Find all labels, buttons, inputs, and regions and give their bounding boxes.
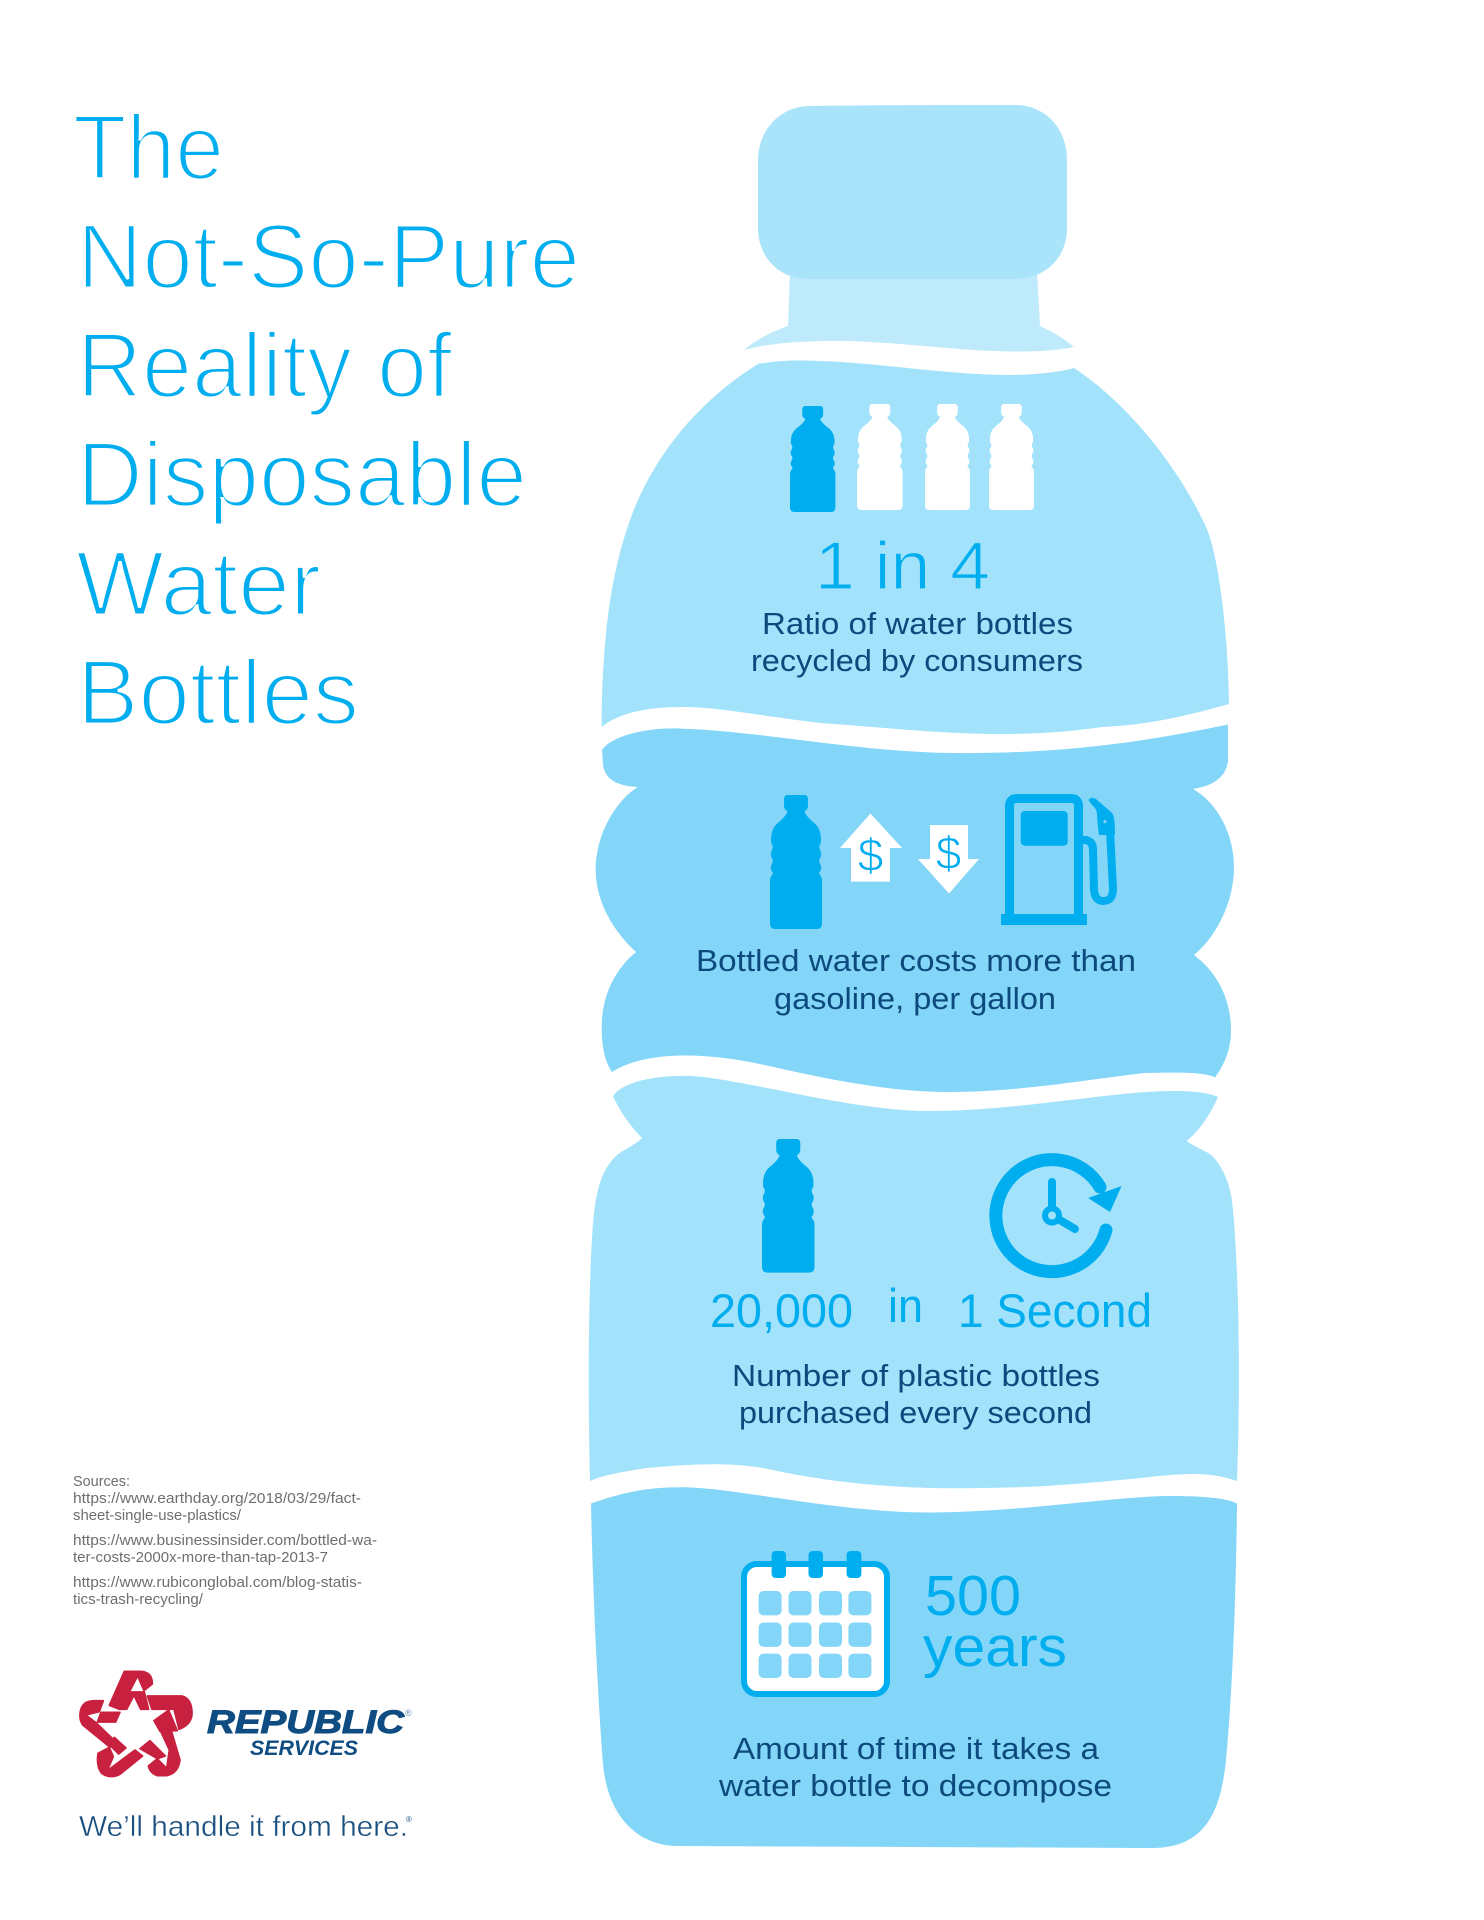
sources: Sources:: [73, 1473, 130, 1490]
wordmark: REPUBLIC: [207, 1704, 405, 1740]
bottle neck: [744, 270, 1074, 352]
icon: white bottle: [857, 404, 903, 510]
stat: 1 Second: 1 Second: [958, 1284, 1152, 1337]
icon: up arrow with dollar: $: [858, 829, 883, 881]
description: water bottle to decompose: [718, 1768, 1112, 1803]
icon: blue bottle: [790, 406, 835, 512]
stat: 1 in 4: 1 in 4: [815, 528, 990, 604]
logo: Republic Services: ®: [406, 1815, 412, 1824]
panel: decomposition time: [591, 1487, 1237, 1848]
sources: tics-trash-recycling/: [73, 1591, 204, 1608]
title: Reality of: [77, 315, 452, 417]
logo: Republic Services: SERVICES: [250, 1737, 358, 1760]
sources: ter-costs-2000x-more-than-tap-2013-7: [73, 1549, 328, 1566]
icon: white bottle: [925, 404, 970, 510]
stat: 20,000: 20,000: [710, 1284, 853, 1337]
bottle: [589, 105, 1239, 1848]
sources: sheet-single-use-plastics/: [73, 1507, 242, 1524]
title: Water: [76, 533, 321, 635]
icon: down arrow with dollar: [918, 825, 979, 894]
logo: Republic Services: [79, 1671, 412, 1843]
panel shape: [589, 1076, 1239, 1488]
icon: white bottle: [989, 404, 1034, 510]
title: [73, 97, 580, 744]
tagline: We’ll handle it from here.: [79, 1811, 408, 1843]
stat: 500 years: 500: [925, 1564, 1021, 1628]
stat: in: in: [888, 1279, 923, 1332]
description: gasoline, per gallon: [774, 981, 1056, 1016]
icon: bottle: [770, 795, 822, 929]
sources: https://www.rubiconglobal.com/blog-statis-: [73, 1574, 362, 1591]
icon: fuel pump: [1001, 798, 1115, 925]
icon: bottle: [762, 1139, 814, 1273]
description: Amount of time it takes a: [733, 1731, 1100, 1766]
description: purchased every second: [739, 1395, 1092, 1430]
panel shape: [602, 360, 1229, 734]
description: [718, 1731, 1112, 1803]
description: recycled by consumers: [751, 643, 1083, 678]
title: Bottles: [77, 642, 359, 744]
sources: https://www.businessinsider.com/bottled-wa-: [73, 1532, 377, 1549]
panel shape: [591, 1487, 1237, 1848]
title: Not-So-Pure: [77, 206, 580, 308]
description: Bottled water costs more than: [696, 943, 1136, 978]
description: [751, 606, 1083, 678]
description: [696, 943, 1136, 1016]
stat: 500 years: years: [923, 1615, 1067, 1679]
description: Ratio of water bottles: [762, 606, 1073, 641]
icon: clock with arrow: [996, 1160, 1122, 1272]
sources: https://www.earthday.org/2018/03/29/fact-: [73, 1490, 361, 1507]
description: [732, 1358, 1100, 1430]
title: Disposable: [77, 424, 527, 526]
panel: recycling ratio: [602, 360, 1229, 734]
bottle cap: [758, 105, 1067, 279]
icon: down arrow with dollar: $: [936, 827, 961, 879]
description: Number of plastic bottles: [732, 1358, 1100, 1393]
stat: 500 years: [923, 1564, 1067, 1679]
icon: calendar: [744, 1551, 887, 1694]
panel: cost vs gasoline: [596, 724, 1234, 1092]
logo: Republic Services: ®: [405, 1708, 412, 1718]
panel shape: [596, 724, 1234, 1092]
panel: bottles per second: [589, 1076, 1239, 1488]
icon: up arrow with dollar: [840, 814, 902, 882]
title: The: [73, 97, 224, 199]
sources: [73, 1473, 377, 1608]
icon: red star: [80, 1671, 192, 1777]
